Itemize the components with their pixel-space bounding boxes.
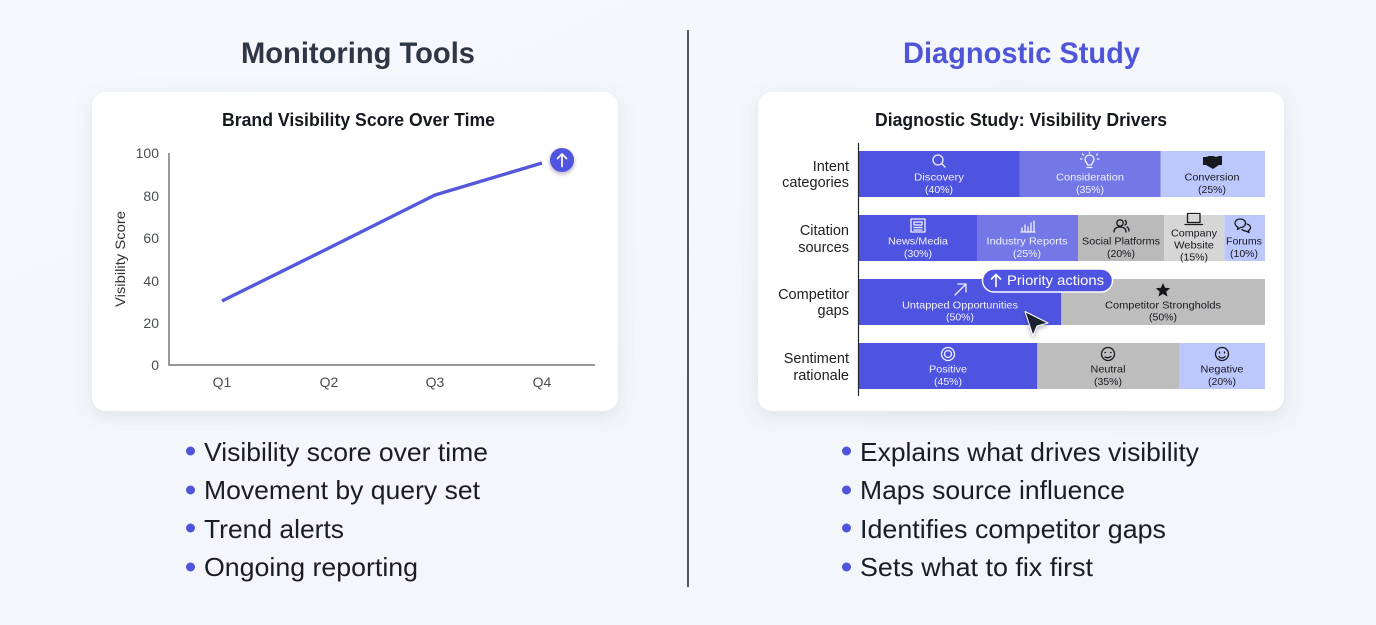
segment: negative xyxy=(1200,348,1244,388)
segment: competitor strongholds: (50%) xyxy=(1149,312,1177,324)
bullet list: diagnostic study: Sets what to fix first xyxy=(860,552,1094,582)
icon: cursor xyxy=(1025,312,1048,336)
segment: forums: (10%) xyxy=(1230,248,1258,260)
x axis labels: Q1 xyxy=(213,374,232,390)
segment: news/media: News/Media xyxy=(888,236,948,248)
heading: Diagnostic Study: Diagnostic Study xyxy=(903,37,1140,70)
panel: diagnostic study stacked bars card xyxy=(758,92,1284,411)
row label xyxy=(778,287,849,319)
row: intent categories xyxy=(782,151,1265,197)
row: sentiment rationale xyxy=(784,343,1265,389)
y axis labels xyxy=(136,145,159,373)
x axis labels xyxy=(213,374,552,390)
y axis labels: 80 xyxy=(143,188,159,204)
segment: competitor strongholds xyxy=(1105,283,1221,324)
bullet list: monitoring tools: Ongoing reporting xyxy=(204,552,418,582)
segment: consideration: Consideration xyxy=(1056,172,1124,184)
chart title: Brand Visibility Score Over Time xyxy=(222,110,495,130)
segment: company website xyxy=(1171,214,1218,264)
segment: positive: (45%) xyxy=(934,376,962,388)
row: competitor gaps xyxy=(778,269,1265,336)
chart title: Diagnostic Study: Visibility Drivers xyxy=(875,110,1167,130)
segment: conversion xyxy=(1184,156,1240,196)
y axis labels: 100 xyxy=(136,145,159,161)
segment: news/media xyxy=(888,219,948,260)
row label: Intent xyxy=(813,159,849,175)
segment: consideration xyxy=(1056,152,1124,196)
row label xyxy=(798,223,849,256)
segment: neutral: Neutral xyxy=(1090,364,1126,376)
segment: discovery: (40%) xyxy=(925,184,953,196)
line chart xyxy=(112,145,595,390)
y axis line xyxy=(858,143,860,396)
segment: company website: (15%) xyxy=(1180,252,1208,264)
callout: priority actions: Priority actions xyxy=(1007,272,1104,288)
bullet list: monitoring tools: Movement by query set xyxy=(204,475,481,505)
panel: monitoring tools line chart card xyxy=(92,92,618,411)
center divider xyxy=(687,30,689,587)
y axis labels: 0 xyxy=(151,357,159,373)
segment: forums xyxy=(1226,219,1262,260)
segment: untapped opportunities xyxy=(902,284,1018,324)
bullet list: monitoring tools: Visibility score over time xyxy=(204,437,488,467)
x axis labels: Q2 xyxy=(320,374,339,390)
bullet list: diagnostic study xyxy=(842,437,1199,582)
segment: social platforms xyxy=(1082,220,1160,260)
row label xyxy=(782,159,849,191)
bullet list: diagnostic study: Explains what drives visibility xyxy=(860,437,1199,467)
row label: Sentiment xyxy=(784,351,849,367)
row label: sources xyxy=(798,240,849,256)
row label: rationale xyxy=(793,368,849,384)
trend line xyxy=(222,163,542,301)
segment: untapped opportunities: Untapped Opportunities xyxy=(902,300,1018,312)
segment: company website: Website xyxy=(1174,240,1214,252)
segment: social platforms: (20%) xyxy=(1107,248,1135,260)
segment: industry reports: Industry Reports xyxy=(986,236,1068,248)
segment: neutral: (35%) xyxy=(1094,376,1122,388)
segment: positive: Positive xyxy=(929,364,967,376)
y axis labels: 20 xyxy=(143,315,159,331)
y axis title: Visibility Score xyxy=(112,211,128,307)
segment: industry reports: (25%) xyxy=(1013,248,1041,260)
segment: social platforms: Social Platforms xyxy=(1082,236,1160,248)
row label: categories xyxy=(782,175,849,191)
segment: industry reports xyxy=(986,221,1068,260)
segment: neutral xyxy=(1090,348,1126,388)
bullet list: monitoring tools xyxy=(186,437,488,582)
callout: priority actions xyxy=(982,269,1112,292)
heading: Monitoring Tools: Monitoring Tools xyxy=(241,37,475,70)
y axis labels: 40 xyxy=(143,273,159,289)
x axis labels: Q3 xyxy=(426,374,445,390)
segment: news/media: (30%) xyxy=(904,248,932,260)
segment: negative: Negative xyxy=(1200,364,1244,376)
segment: competitor strongholds: Competitor Strongholds xyxy=(1105,300,1221,312)
segment: negative: (20%) xyxy=(1208,376,1236,388)
row label: Citation xyxy=(800,223,849,239)
segment: untapped opportunities: (50%) xyxy=(946,312,974,324)
row: citation sources xyxy=(798,214,1265,264)
x axis labels: Q4 xyxy=(533,374,552,390)
segment: discovery: Discovery xyxy=(914,172,965,184)
y axis labels: 60 xyxy=(143,230,159,246)
icon: up arrow badge xyxy=(550,148,574,172)
segment: company website: Company xyxy=(1171,228,1218,240)
segment: discovery xyxy=(914,155,965,196)
segment: conversion: (25%) xyxy=(1198,184,1226,196)
bullet list: diagnostic study: Identifies competitor gaps xyxy=(860,514,1166,544)
bullet list: diagnostic study: Maps source influence xyxy=(860,475,1125,505)
row label: gaps xyxy=(818,303,849,319)
row label: Competitor xyxy=(778,287,849,303)
segment: conversion: Conversion xyxy=(1184,172,1240,184)
segment: consideration: (35%) xyxy=(1076,184,1104,196)
segment: positive xyxy=(929,348,967,388)
bullet list: monitoring tools: Trend alerts xyxy=(204,514,344,544)
segment: forums: Forums xyxy=(1226,236,1262,248)
row label xyxy=(784,351,849,384)
